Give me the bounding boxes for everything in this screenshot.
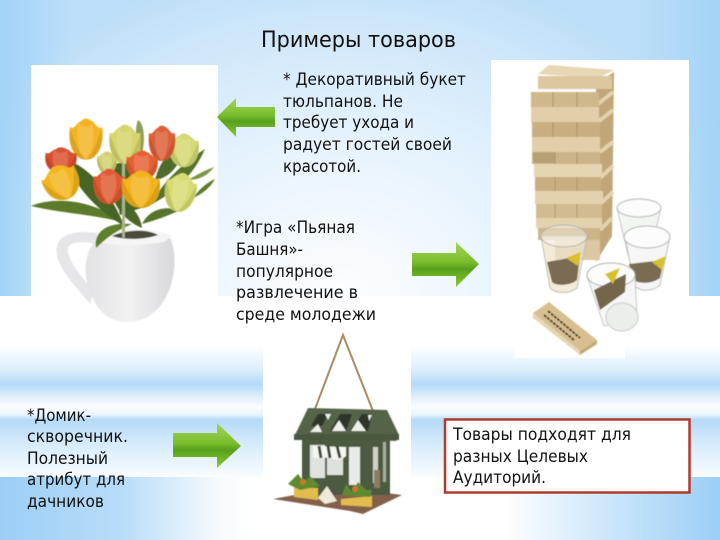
icon: jug [57,229,174,322]
text: birdhouse description: Полезный [27,449,108,468]
text: birdhouse description: атрибут для [27,470,125,489]
callout: suitability note: Аудиторий. [453,468,546,487]
text: tulip bouquet description [283,70,466,176]
callout: suitability note: разных Целевых [453,447,588,466]
callout: suitability note [445,420,690,492]
text: tower game description [236,218,376,324]
arrow: pointing left to bouquet [217,98,275,137]
icon: wooden block tower [531,65,614,262]
icon: hanging rope [315,335,373,411]
text: tower game description: *Игра «Пьяная [236,218,355,237]
panel: tulip bouquet photo [31,65,218,326]
text: tulip bouquet description: красотой. [283,157,361,176]
text: tulip bouquet description: * Декоративный букет [283,70,466,89]
text: tulip bouquet description: тюльпанов. Не [283,92,403,111]
icon: leaves [31,120,215,248]
icon: birdhouse [273,408,402,514]
icon: shot glasses [541,199,670,331]
text: birdhouse description: скворечник. [27,427,128,446]
text: tower game description: популярное [236,262,333,281]
title: Примеры товаров [261,28,456,53]
icon: wooden task card [533,302,597,355]
text: tower game description: среде молодежи [236,305,376,324]
icon: tulips [38,119,199,214]
panel: birdhouse photo [263,335,411,540]
text: tower game description: Башня»- [236,240,303,259]
text: birdhouse description: дачников [27,492,104,511]
text: tulip bouquet description: радует гостей своей [283,135,452,154]
callout: suitability note: Товары подходят для [452,425,631,444]
text: birdhouse description [27,406,128,511]
arrow: pointing right to birdhouse [173,423,241,468]
panel: drinking tower game photo [491,60,689,358]
arrow: pointing right to tower game [412,242,479,287]
text: birdhouse description: *Домик- [27,406,91,425]
text: tulip bouquet description: требует ухода и [283,113,414,132]
text: tower game description: развлечение в [236,283,358,302]
